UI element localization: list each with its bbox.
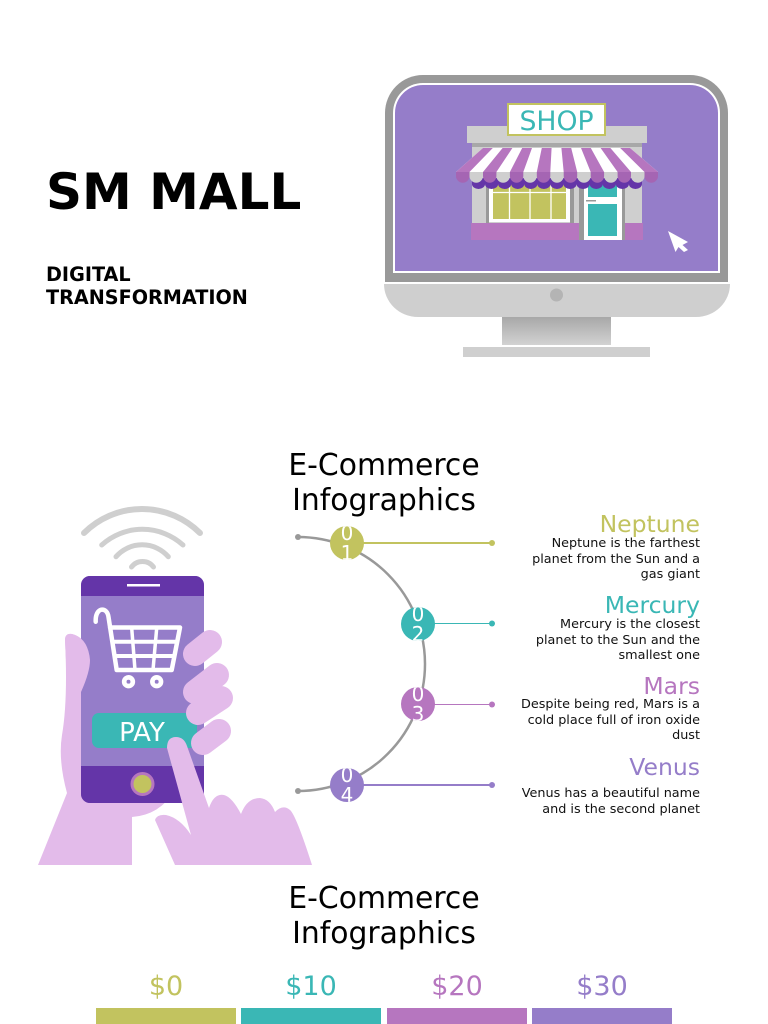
pay button	[92, 713, 197, 748]
text: venus: Venus has a beautiful name and is the second planet	[522, 786, 700, 816]
pointing hand	[155, 737, 312, 865]
text: mercury: Mercury is the closest planet to the Sun and the smallest one	[536, 617, 700, 663]
price: $30: $30	[576, 971, 628, 1002]
node 04	[330, 768, 364, 802]
illustration: hand holding phone	[38, 506, 312, 865]
chart: curved timeline	[295, 534, 495, 794]
node 02	[401, 606, 435, 640]
connector: mars	[418, 702, 495, 708]
label: venus: Venus	[629, 753, 700, 781]
pay button: PAY	[119, 718, 165, 748]
shop door	[584, 182, 622, 240]
label: neptune: Neptune	[600, 510, 700, 538]
connector: mercury	[418, 620, 495, 626]
fingers	[195, 642, 221, 743]
heading: e-commerce infographics	[288, 448, 480, 518]
subtitle	[46, 263, 248, 309]
text: mars: Despite being red, Mars is a cold place full of iron oxide dust	[521, 697, 700, 743]
shop sign: SHOP	[519, 106, 594, 137]
heading: e-commerce infographics 2	[288, 881, 480, 951]
icon: wifi signal	[84, 509, 200, 567]
price: $20: $20	[431, 971, 483, 1002]
icon: desktop monitor with shop	[384, 75, 730, 357]
left hand palm	[38, 634, 175, 865]
icon: shopping cart	[96, 610, 180, 686]
subtitle: DIGITAL	[46, 263, 131, 286]
heading: e-commerce infographics: Infographics	[292, 483, 476, 518]
title: SM MALL	[46, 163, 301, 221]
label: mercury: Mercury	[605, 591, 700, 619]
bar: $0	[96, 1008, 236, 1024]
node 03	[401, 687, 435, 721]
shop wall	[467, 126, 647, 240]
bar: $10	[241, 1008, 381, 1024]
connector: venus	[347, 782, 495, 788]
bar: $20	[387, 1008, 527, 1024]
left thumb	[65, 634, 90, 700]
connector: neptune	[347, 540, 495, 546]
text: neptune: Neptune is the farthest planet from the Sun and a gas giant	[532, 536, 700, 582]
heading: e-commerce infographics 2: E-Commerce	[288, 881, 480, 916]
bar: $30	[532, 1008, 672, 1024]
phone	[81, 576, 204, 803]
icon: cursor	[668, 231, 688, 252]
shop window	[489, 182, 570, 222]
shop awning	[456, 148, 658, 189]
heading: e-commerce infographics: E-Commerce	[288, 448, 480, 483]
node 01	[330, 526, 364, 560]
label: mars: Mars	[643, 672, 700, 700]
price: $0: $0	[149, 971, 183, 1002]
subtitle: TRANSFORMATION	[46, 286, 248, 309]
price: $10: $10	[285, 971, 337, 1002]
heading: e-commerce infographics 2: Infographics	[292, 916, 476, 951]
